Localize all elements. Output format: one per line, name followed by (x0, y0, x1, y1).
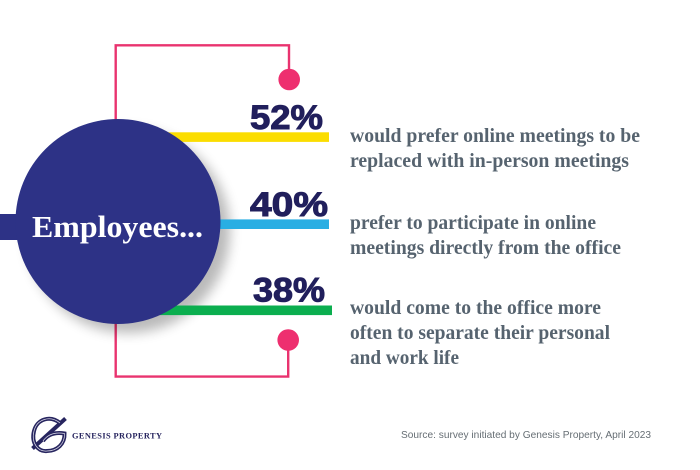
source note: Source: survey initiated by Genesis Property, April 2023 (401, 429, 651, 441)
top pink connector with dot (116, 45, 300, 125)
main circle (16, 119, 220, 324)
description 1: replaced with in-person meetings (350, 151, 629, 172)
green bar (150, 306, 332, 315)
yellow bar (150, 132, 329, 142)
description 2: prefer to participate in online (350, 213, 596, 234)
circle shadow (26, 129, 230, 333)
description 3: and work life (350, 348, 459, 369)
icon: Genesis Property logo mark (32, 418, 66, 451)
description 2 (350, 213, 621, 259)
description 3: often to separate their personal (350, 323, 611, 344)
bottom pink connector with dot (116, 320, 299, 377)
description 1 (350, 126, 640, 172)
description 1: would prefer online meetings to be (350, 126, 640, 147)
stat 38%: 38% (253, 272, 325, 310)
description 3: would come to the office more (350, 298, 601, 319)
description 2: meetings directly from the office (350, 238, 621, 259)
logo wordmark: GENESIS PROPERTY (72, 432, 162, 440)
stat 40%: 40% (250, 186, 328, 224)
blue bar (200, 219, 329, 229)
stat 52%: 52% (250, 99, 323, 137)
left tab (0, 214, 30, 240)
circle label: Employees... (32, 209, 203, 244)
description 3 (350, 298, 611, 369)
